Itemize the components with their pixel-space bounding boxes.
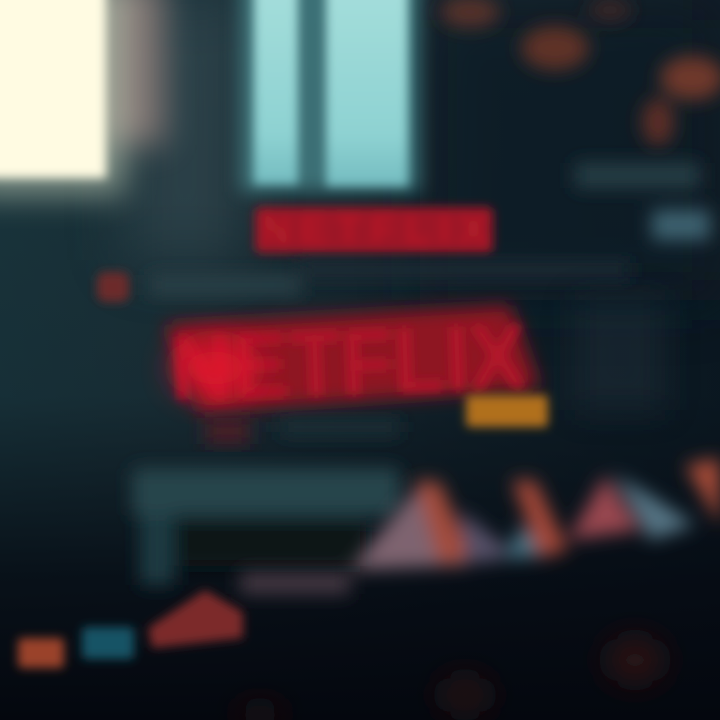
top-right orange blurred marks [440,0,720,146]
large red logo: NETFLIX [169,306,527,420]
teal window panes [240,0,420,192]
bottom dim red glows [235,638,663,720]
dim text under logo [205,418,400,444]
top red heading: NETFLIX [262,208,487,252]
orange badge [466,395,548,427]
dark right column detail [575,300,665,410]
teal input frame [132,468,400,585]
bottom colored chips [18,590,243,668]
small red dot [97,272,129,302]
bright window light [0,0,165,195]
striped triangle band [240,458,720,594]
right-side teal labels [575,163,710,240]
grey nav bar [150,262,630,295]
